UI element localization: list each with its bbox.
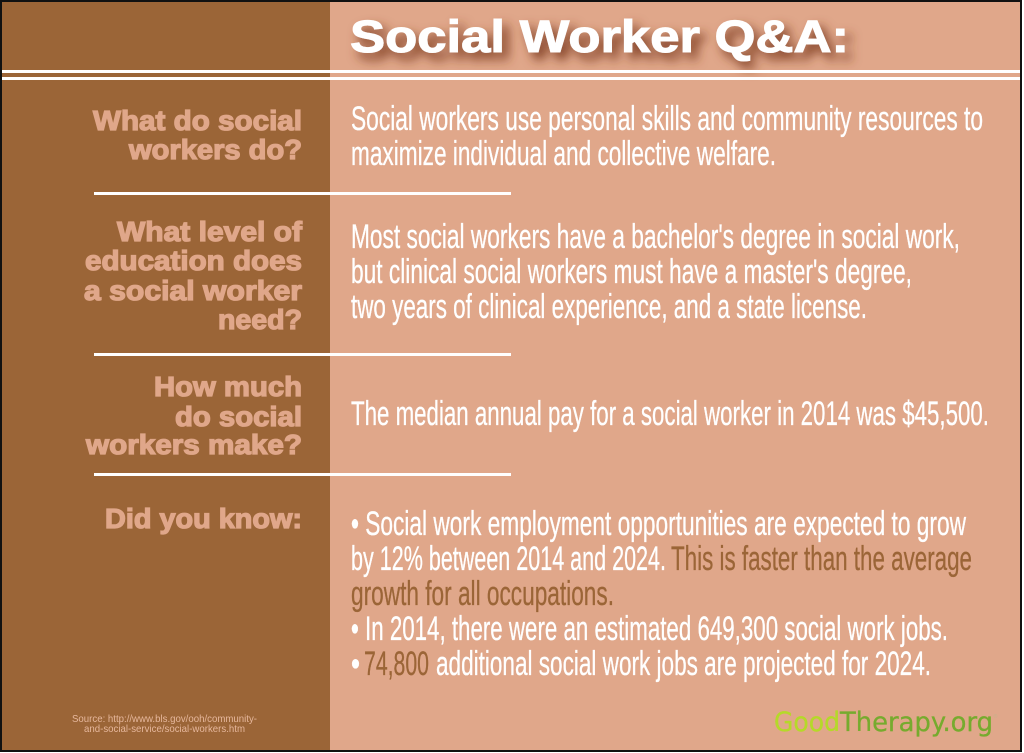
question 2: need? xyxy=(218,304,302,335)
question 1: What do social xyxy=(93,105,302,136)
answer 4: bullet list: by 12% between 2014 and 2024. xyxy=(351,540,666,578)
source note xyxy=(72,713,257,735)
question 1: workers do? xyxy=(128,134,302,165)
answer 1: maximize individual and collective welfare. xyxy=(351,135,776,173)
logo: GoodTherapy.org: ® xyxy=(993,713,998,720)
answer 4: bullet list: • xyxy=(351,645,360,683)
answer 1 xyxy=(351,100,983,173)
answer 2 xyxy=(351,218,960,326)
source note: Source: http://www.bls.gov/ooh/community- xyxy=(72,713,257,725)
question 3 xyxy=(85,371,302,460)
question 3: workers make? xyxy=(85,429,302,460)
title: Social Worker Q&A: xyxy=(350,11,849,62)
question 2: a social worker xyxy=(84,275,302,306)
panel: left questions column xyxy=(1,1,330,751)
question 4: Did you know: xyxy=(105,503,302,534)
question 2: education does xyxy=(85,245,302,276)
answer 4: bullet list: growth for all occupations. xyxy=(351,575,614,613)
question 2 xyxy=(84,216,303,335)
answer 4: bullet list: 74,800 xyxy=(364,645,429,683)
logo: GoodTherapy.org: Therapy.org xyxy=(839,707,993,738)
logo: GoodTherapy.org xyxy=(774,707,998,738)
question 3: How much xyxy=(154,371,302,402)
question 2: What level of xyxy=(117,216,303,247)
question 3: do social xyxy=(175,401,302,432)
source note: and-social-service/social-workers.htm xyxy=(84,723,245,735)
question 1 xyxy=(93,105,302,165)
logo: GoodTherapy.org: Good xyxy=(774,707,840,738)
answer 4: bullet list xyxy=(351,505,972,683)
